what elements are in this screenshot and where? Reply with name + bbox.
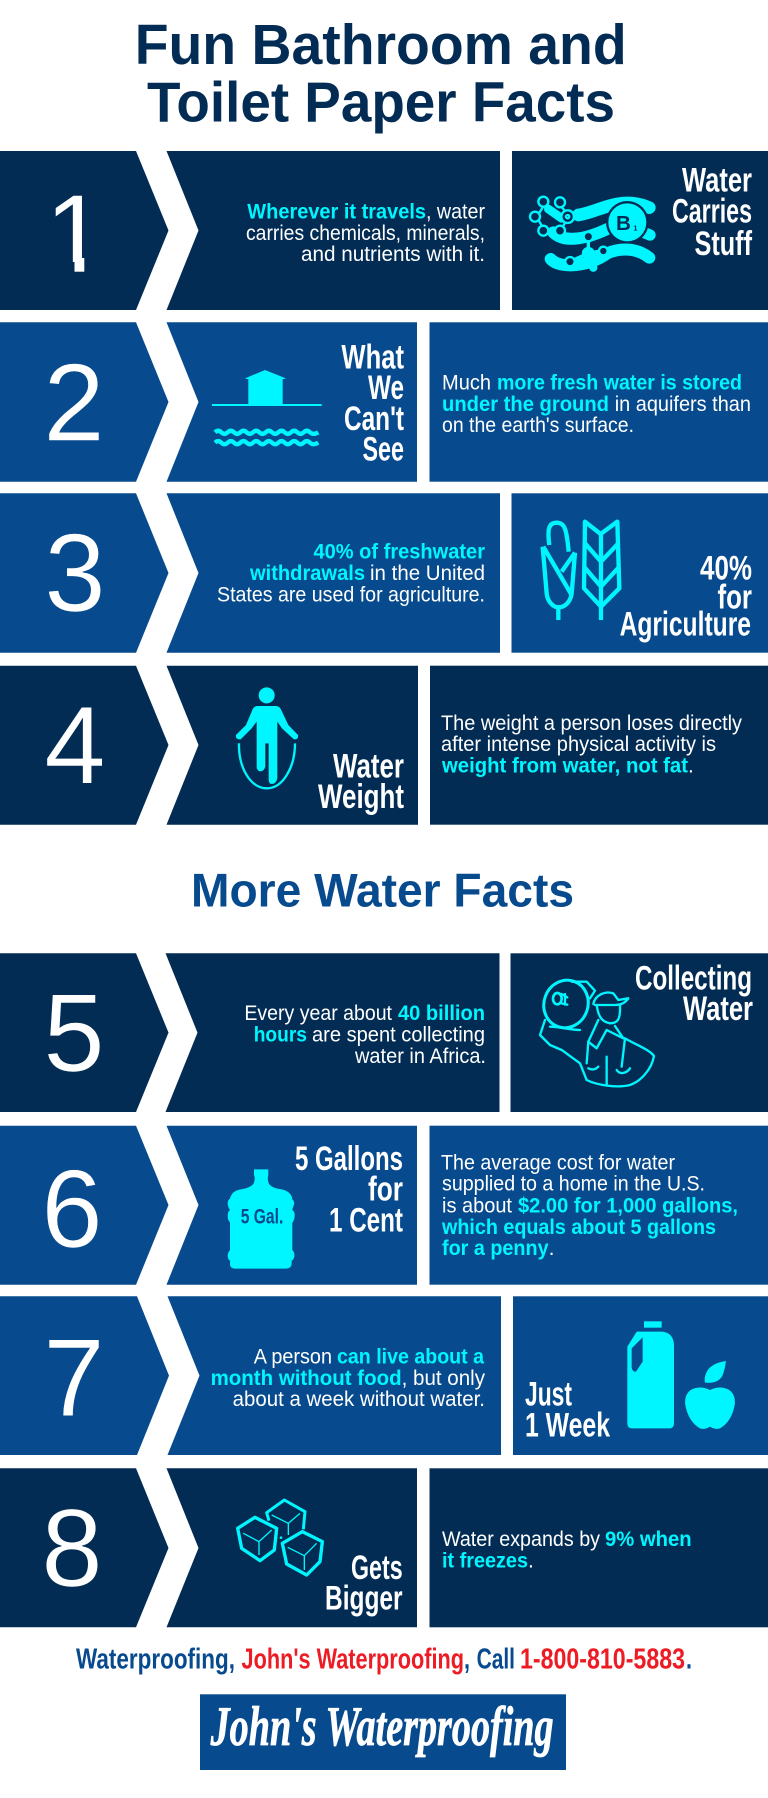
fact 3 label [620, 549, 752, 644]
fact 6 text: for a penny [442, 1237, 549, 1260]
fact 6 text: supplied to a home in the U.S. [442, 1173, 705, 1196]
fact 2 text: under the ground [442, 393, 609, 416]
number 7: 7 [43, 1317, 105, 1440]
fact 2 label [341, 338, 404, 469]
number 2: 2 [43, 342, 105, 465]
fact 8 label [325, 1549, 403, 1617]
fact 2 text: in aquifers than [615, 393, 751, 416]
title: Fun Bathroom and [135, 14, 627, 77]
fact 8 text: 9% when [605, 1528, 692, 1551]
fact 8 text: . [528, 1549, 534, 1572]
fact 2 text: Much [442, 371, 491, 394]
fact 1 row [0, 151, 768, 310]
number 6: 6 [41, 1148, 103, 1271]
fact 6 text: The average cost for water [441, 1151, 675, 1174]
number 1: 1 [45, 173, 106, 296]
fact 3 text: 40% of freshwater [314, 540, 485, 563]
fact 7 text: month without food [211, 1367, 402, 1390]
contact line: , [464, 1643, 470, 1675]
fact 6 text: $2.00 for 1,000 gallons, [518, 1194, 738, 1217]
fact 8 text: Water expands by [442, 1528, 600, 1551]
fact 4 label: Weight [318, 778, 404, 816]
section heading: More Water Facts [191, 865, 574, 918]
fact 2 label: Can't [344, 400, 404, 438]
fact 4 row [0, 666, 768, 825]
fact 6 text: is about [442, 1194, 512, 1217]
fact 2 label: What [341, 338, 404, 376]
logo [200, 1694, 566, 1770]
fact 1 label [672, 162, 752, 263]
icon: molecules in water: 1 [633, 224, 637, 233]
fact 1 text [246, 200, 485, 266]
number 1 [55, 196, 84, 272]
fact 6 text: . [549, 1237, 554, 1260]
icon: ice cubes [238, 1500, 322, 1575]
fact 3 row [0, 493, 768, 653]
fact 1 text: , water [426, 200, 485, 223]
contact line: . [686, 1643, 692, 1675]
fact 3 label: 40% [700, 549, 752, 587]
fact 6 label: 1 Cent [329, 1202, 403, 1240]
fact 5 text: Every year about [244, 1002, 392, 1025]
fact 3 text: States are used for agriculture. [217, 583, 485, 606]
icon: milk jug and apple [627, 1321, 735, 1429]
fact 2 label: We [368, 369, 404, 407]
icon: corn and wheat [543, 522, 619, 620]
fact 2 label: See [362, 431, 404, 469]
contact line: 1-800-810-5883 [520, 1643, 685, 1675]
fact 1 text: Wherever it travels [247, 200, 426, 223]
contact line: John's Waterproofing [242, 1643, 464, 1675]
fact 7 text: , but only [402, 1367, 485, 1390]
logo: John's Waterproofing [210, 1696, 554, 1758]
fact 5 text: water in Africa. [354, 1045, 486, 1068]
fact 4 label [318, 748, 404, 816]
fact 7 row [0, 1296, 768, 1455]
icon: 5 gallon water jug [228, 1169, 295, 1269]
icon: person skipping rope [236, 687, 298, 788]
icon: house above aquifer [212, 370, 322, 444]
fact 4 text: weight from water, not fat [441, 755, 688, 778]
fact 2 text: more fresh water is stored [497, 371, 742, 394]
fact 6 label: for [368, 1171, 403, 1209]
fact 5 label [635, 959, 753, 1028]
fact 8 text: it freezes [442, 1549, 528, 1572]
fact 7 text: A person [254, 1345, 332, 1368]
icon: 5 gallon water jug: 5 Gal. [241, 1204, 283, 1228]
fact 7 label [525, 1376, 611, 1445]
fact 8 text [442, 1528, 692, 1572]
fact 4 text: . [688, 755, 694, 778]
fact 6 label [295, 1140, 403, 1240]
fact 8 label: Gets [351, 1549, 403, 1587]
fact 6 row [0, 1126, 768, 1285]
fact 2 text: on the earth's surface. [442, 414, 634, 437]
number 8: 8 [41, 1487, 103, 1610]
fact 7 label: 1 Week [525, 1407, 611, 1445]
icon: molecules in water [530, 197, 650, 271]
fact 7 text [211, 1345, 485, 1411]
fact 3 text: in the United [370, 562, 485, 585]
fact 7 text: about a week without water. [233, 1388, 485, 1411]
fact 1 text: and nutrients with it. [301, 243, 485, 266]
fact 5 text: are spent collecting [312, 1023, 485, 1046]
title: Toilet Paper Facts [147, 72, 615, 135]
fact 6 text [441, 1151, 738, 1260]
fact 1 text: carries chemicals, minerals, [246, 222, 485, 245]
number 4: 4 [44, 684, 106, 807]
number 5: 5 [43, 972, 105, 1095]
number 3: 3 [44, 512, 106, 635]
fact 4 text: after intense physical activity is [441, 733, 716, 756]
contact line: Call [477, 1643, 515, 1675]
fact 8 label: Bigger [325, 1579, 403, 1617]
fact 3 text: withdrawals [249, 562, 365, 585]
fact 5 row [0, 953, 768, 1112]
contact line [76, 1643, 692, 1675]
fact 4 text: The weight a person loses directly [441, 712, 742, 735]
fact 6 text: which equals about 5 gallons [441, 1216, 716, 1239]
contact line: Waterproofing, [76, 1643, 235, 1675]
fact 7 text: can live about a [337, 1345, 484, 1368]
fact 5 text: 40 billion [398, 1002, 485, 1025]
fact 8 row [0, 1468, 768, 1627]
fact 4 text [441, 712, 742, 778]
fact 3 text [217, 540, 485, 606]
fact 5 text: hours [254, 1023, 307, 1046]
title [135, 14, 627, 135]
icon: man carrying water bottle [537, 974, 654, 1086]
fact 3 label: for [718, 578, 752, 616]
fact 7 label: Just [525, 1376, 572, 1414]
fact 2 text [442, 371, 751, 437]
fact 4 label: Water [333, 748, 404, 786]
fact 2 row [0, 322, 768, 482]
fact 6 label: 5 Gallons [295, 1140, 403, 1178]
fact 5 text [244, 1002, 486, 1068]
icon: molecules in water: B [616, 212, 631, 235]
